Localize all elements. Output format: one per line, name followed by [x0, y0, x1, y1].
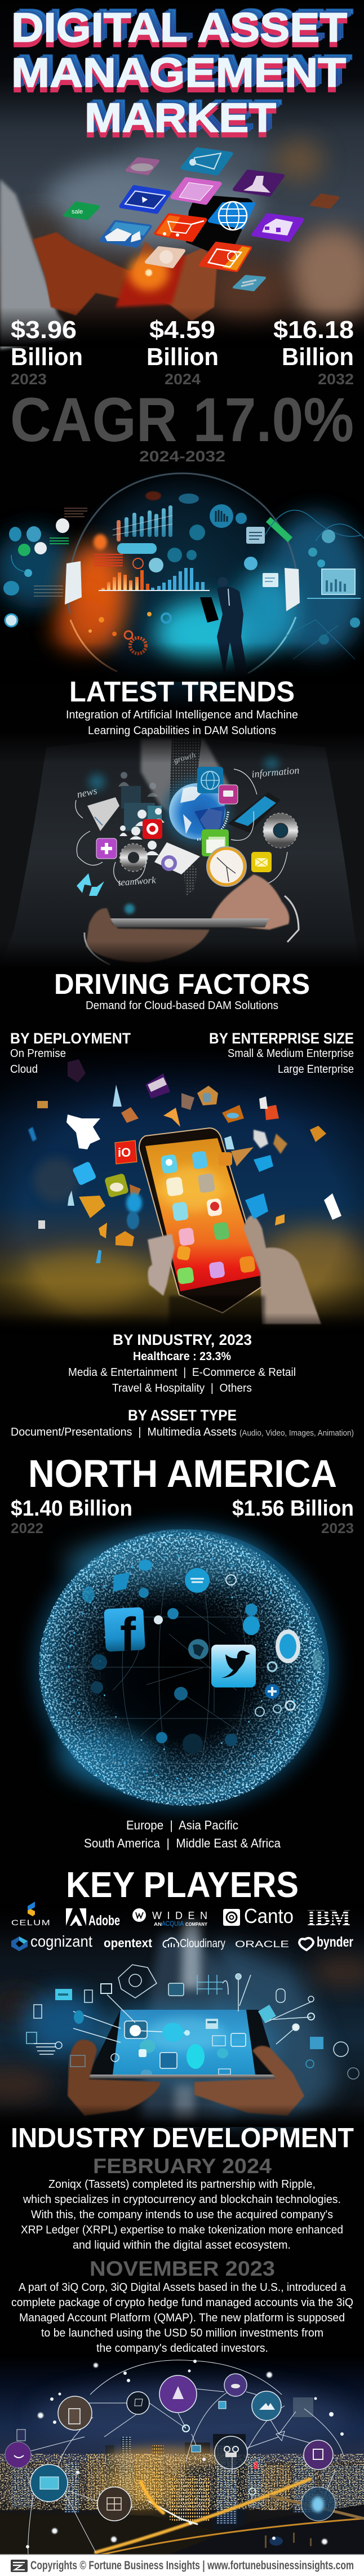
icon: blue truck: [101, 222, 150, 246]
right hand: [194, 2046, 304, 2116]
icon: cloud: [179, 494, 199, 504]
title: MANAGEMENT: [15, 48, 350, 94]
heading: latest trends: LATEST TRENDS: [69, 676, 295, 708]
icon: facebook tile: f: [120, 1608, 136, 1661]
logo: celum: CELUM: [11, 1918, 51, 1927]
title: [11, 1, 353, 146]
red striped lines: [94, 554, 123, 566]
icon: left node bubbles: [3, 518, 69, 596]
icon: cyan list: [234, 276, 265, 290]
glows: [89, 756, 278, 914]
bar chart: upper blue bars: [113, 505, 172, 541]
title: MARKET: [86, 95, 278, 140]
segment: by asset type: [11, 1407, 354, 1438]
icon: blue globe tile: [197, 767, 223, 793]
stat: 2032 market size: $16.18: [273, 316, 354, 344]
logo: widen: ACQUIA: [162, 1920, 184, 1927]
title: DIGITAL ASSET: [11, 8, 347, 54]
title: MARKET: [85, 100, 276, 146]
squiggle arrows: [76, 769, 287, 885]
icon: lower left rings and gears: [5, 612, 360, 659]
segment: by enterprise size: Small & Medium Enterprise: [228, 1047, 354, 1060]
logo: widen: WIDEN: [152, 1910, 207, 1921]
segment: by industry: BY INDUSTRY, 2023: [113, 1331, 252, 1348]
logo: bynder: bynder: [317, 1934, 353, 1950]
network lines: [28, 2360, 344, 2555]
title: MARKET: [88, 94, 279, 139]
stat: 2024 market size: 2024: [165, 371, 201, 388]
stat: 2024 market size: $4.59: [149, 316, 215, 344]
title: DIGITAL ASSET: [11, 5, 347, 51]
grid lines: [49, 1538, 319, 1797]
logo: adobe: [66, 1908, 120, 1929]
panel: hero image with floating app icons: [0, 0, 364, 349]
development: november 2023: [11, 2257, 353, 2355]
bar chart: lower orange and blue bars: [99, 568, 210, 591]
stat: north america 2023: 2023: [321, 1521, 354, 1536]
heading: north america: NORTH AMERICA: [28, 1452, 337, 1495]
title: MANAGEMENT: [13, 50, 348, 95]
handwritten labels: growth: [173, 751, 197, 765]
segment: by industry: Media & Entertainment | E-Commerce & Retail: [68, 1366, 296, 1379]
panel: social network globe: [22, 1512, 347, 1821]
title: MARKET: [85, 98, 276, 144]
icon: left gear: [121, 845, 147, 870]
icon: fortune business insights logo: [11, 2560, 28, 2572]
icon: sleeve: [0, 179, 76, 349]
stat: 2032 market size: [273, 316, 354, 388]
icon: pink chat tile: [219, 785, 238, 804]
heading: key players: KEY PLAYERS: [66, 1864, 299, 1905]
fades: [0, 730, 364, 763]
stat: 2023 market size: Billion: [11, 343, 83, 371]
text: other regions: [84, 1818, 281, 1850]
upper and lower bright caps: [62, 1535, 265, 1586]
logo: canto: Canto: [244, 1904, 294, 1927]
footer bar: [0, 2554, 364, 2576]
segment: by deployment: On Premise: [10, 1047, 66, 1060]
logo: oracle: ORACLE: [235, 1939, 289, 1949]
noise speckle: [39, 1529, 326, 1806]
phone: [139, 1128, 265, 1313]
icon: chart screen: [307, 569, 361, 598]
logo: widen: COMPANY: [185, 1922, 208, 1927]
logo: widen: [132, 1908, 208, 1927]
development: february 2024: XRP Ledger (XRPL) expertise to make tokenization more enhanced: [21, 2224, 343, 2236]
holographic icons: [26, 1965, 359, 2079]
segment: by industry: [68, 1331, 296, 1394]
left hand: [68, 2040, 161, 2116]
icon: purple plus tile: [96, 838, 117, 859]
panel: tablet in hands illustration: [0, 1904, 364, 2127]
icon: violet shop: [254, 215, 302, 240]
heading: industry development: INDUSTRY DEVELOPMENT: [11, 2123, 354, 2153]
text: trends description: Learning Capabilities in DAM Solutions: [88, 725, 276, 737]
panel: smart city network illustration: [0, 2355, 364, 2555]
icon: person on laptop: [200, 577, 248, 676]
text: trends description: [66, 709, 298, 737]
icon: yellow mail tile: [251, 852, 272, 872]
icon: purple woman: [234, 171, 283, 195]
stat: north america 2022: [11, 1496, 132, 1536]
fades: [0, 1904, 364, 1947]
handwritten labels: information: [251, 765, 300, 780]
icon: document right: [246, 527, 265, 544]
stat: north america 2023: [232, 1496, 354, 1536]
panel: business person with tablet illustration: [0, 730, 364, 970]
development: february 2024: which specializes in cryptocurrency and blockchain technologies.: [23, 2193, 341, 2206]
logo: adobe: Adobe: [88, 1913, 120, 1929]
stat: 2032 market size: Billion: [282, 343, 354, 371]
title: MARKET: [90, 92, 282, 137]
suit jacket: [0, 738, 361, 969]
logo: cognizant: [11, 1933, 92, 1951]
icon: network people: [118, 772, 162, 831]
fade bottom: [0, 642, 364, 682]
handwritten labels: news: [76, 785, 98, 800]
golden glow: [101, 2462, 180, 2507]
arc: outer ring: [68, 473, 298, 614]
development: february 2024: [21, 2155, 343, 2251]
logo: cloudinary: Cloudinary: [180, 1937, 225, 1950]
logo: celum: [11, 1902, 51, 1927]
title: MANAGEMENT: [17, 47, 352, 92]
segment: by asset type: BY ASSET TYPE: [128, 1407, 237, 1424]
globe: [163, 778, 231, 845]
left hand: [86, 908, 210, 962]
right hand: [209, 874, 290, 930]
scattered data dots: [45, 1534, 324, 1800]
icon: floating app tiles: iO: [118, 1145, 131, 1160]
logo: widen: AN: [154, 1922, 162, 1927]
handwritten labels: [76, 751, 300, 888]
roads: [96, 2479, 364, 2555]
handwritten labels: teamwork: [118, 874, 157, 888]
icon: beige phone app: [147, 248, 184, 267]
stat: 2023 market size: 2023: [11, 371, 47, 388]
water reflection: [265, 2533, 312, 2548]
icon: floating app tiles: [28, 1059, 341, 1263]
icon: hands holding phone: [33, 232, 217, 321]
title: DIGITAL ASSET: [17, 1, 353, 47]
app grid: [161, 1151, 256, 1285]
pill: [117, 543, 157, 554]
heading: driving factors: DRIVING FACTORS: [54, 968, 310, 1000]
text: other regions: South America | Middle East & Africa: [84, 1836, 281, 1850]
arc: green segment: [268, 519, 290, 540]
title: DIGITAL ASSET: [15, 3, 351, 48]
icon: right spheres: [265, 510, 364, 567]
logo: opentext: opentext: [104, 1936, 153, 1950]
icon: gear cluster: [149, 525, 258, 572]
ring highlights: [65, 561, 82, 605]
development: november 2023: the company's dedicated investors.: [96, 2342, 268, 2355]
tablet screen: [113, 2010, 255, 2077]
tie: [169, 738, 202, 811]
fade to black: [0, 307, 364, 347]
icon: right gear: [265, 815, 296, 846]
logo: cognizant: cognizant: [30, 1933, 92, 1950]
logo: bynder: [299, 1934, 353, 1950]
tablet: [109, 918, 269, 927]
city lights speckle: [0, 2454, 364, 2510]
icon: green sale tags: [65, 203, 99, 219]
icon: blue megaphone: [183, 149, 231, 174]
segment: by deployment: BY DEPLOYMENT: [10, 1030, 131, 1047]
light dots: [26, 2360, 344, 2548]
icon: blue video: [121, 187, 169, 212]
icon: document lower: [263, 573, 278, 587]
icon: phone: [186, 194, 253, 259]
node rings: [5, 2374, 335, 2521]
text: other regions: Europe | Asia Pacific: [126, 1818, 238, 1832]
panel: analytics dome illustration: [0, 468, 364, 710]
stat: north america 2022: 2022: [11, 1521, 43, 1536]
stat: 2023 market size: $3.96: [11, 316, 77, 344]
logos: key players: [11, 1902, 353, 1951]
hands: [148, 1216, 321, 1324]
jacket and shirt: [141, 1933, 237, 2124]
heading: latest trends: [66, 676, 298, 737]
development: november 2023: complete package of crypto hedge fund managed accounts via the 3iQ: [11, 2297, 353, 2309]
icon: white people group: [119, 808, 165, 855]
icon: pie bubble: [210, 504, 247, 528]
icon: wall clock: [207, 847, 246, 886]
icon: green sale tags: sale: [72, 208, 83, 215]
development: february 2024: With this, the company intends to use the acquired company's: [31, 2209, 333, 2221]
ground: [0, 2513, 237, 2555]
title: DIGITAL ASSET: [11, 10, 347, 56]
stat: 2032 market size: 2032: [318, 371, 354, 388]
stat: north america 2022: $1.40 Billion: [11, 1496, 132, 1521]
development: november 2023: Managed Account Platform (QMAP). The new platform is supposed: [19, 2312, 345, 2324]
icon: blue globe app: [210, 202, 254, 230]
development: november 2023: to be launched using the USD 50 million investments from: [41, 2327, 323, 2339]
segment: by enterprise size: Large Enterprise: [278, 1063, 354, 1076]
logo: ibm: IBM: [307, 1905, 350, 1930]
icon: brown share: [312, 195, 338, 207]
segment: by deployment: Cloud: [10, 1063, 38, 1076]
development: november 2023: NOVEMBER 2023: [90, 2257, 275, 2280]
shirt: [141, 739, 231, 828]
icon: green folder tile: [202, 829, 229, 856]
title: MANAGEMENT: [11, 50, 346, 96]
segment: by industry: Travel & Hospitality | Others: [112, 1382, 252, 1394]
icon: pink document: [172, 179, 220, 203]
CAGR figure: 2024-2032: [139, 448, 225, 465]
logo: canto: [223, 1904, 294, 1927]
text: trends description: Integration of Artificial Intelligence and Machine: [66, 709, 298, 721]
development: february 2024: and liquid within the digital asset ecosystem.: [73, 2239, 291, 2251]
icon: red cart: [156, 215, 205, 240]
icon: red gear tile: [143, 819, 162, 839]
title: MANAGEMENT: [11, 55, 346, 101]
title: MANAGEMENT: [11, 53, 346, 99]
tablet frame: [88, 2010, 278, 2075]
title: MARKET: [85, 95, 276, 141]
icon: small social bubbles: [82, 1560, 322, 1754]
icon: cyan arrows: [77, 873, 104, 896]
icon: chart paper: [154, 842, 200, 874]
icon: twitter tile: [211, 1645, 256, 1687]
segment: by deployment: [10, 1030, 131, 1076]
icon: red money: [201, 243, 250, 270]
panel: smartphone with flying apps illustration: [0, 1048, 364, 1335]
development: february 2024: FEBRUARY 2024: [93, 2155, 272, 2178]
stat: 2024 market size: [147, 316, 219, 388]
segment: by industry: Healthcare : 23.3%: [133, 1350, 231, 1363]
tablet edge: [88, 2075, 278, 2078]
icon: news sheet: [87, 797, 119, 831]
icon: facebook tile: [104, 1607, 145, 1661]
segment: by asset type: Document/Presentations | Multimedia Assets: [11, 1426, 237, 1438]
stat: 2023 market size: [11, 316, 83, 388]
icon: smartphone: [228, 792, 281, 833]
segment: by asset type: (Audio, Video, Images, Animation): [239, 1428, 354, 1438]
logo: cloudinary: [163, 1937, 225, 1950]
stat: north america 2023: $1.56 Billion: [232, 1496, 354, 1521]
title: DIGITAL ASSET: [13, 4, 349, 50]
skyline: [0, 2397, 364, 2530]
text: driving factor description: Demand for Cloud-based DAM Solutions: [86, 1000, 278, 1012]
icon: pink cloud: [127, 159, 158, 174]
stat: 2024 market size: Billion: [147, 343, 219, 371]
segment: by enterprise size: [209, 1030, 354, 1076]
development: november 2023: A part of 3iQ Corp, 3iQ Digital Assets based in the U.S., introduced a: [19, 2281, 347, 2294]
development: february 2024: Zoniqx (Tassets) completed its partnership with Ripple,: [48, 2178, 316, 2191]
